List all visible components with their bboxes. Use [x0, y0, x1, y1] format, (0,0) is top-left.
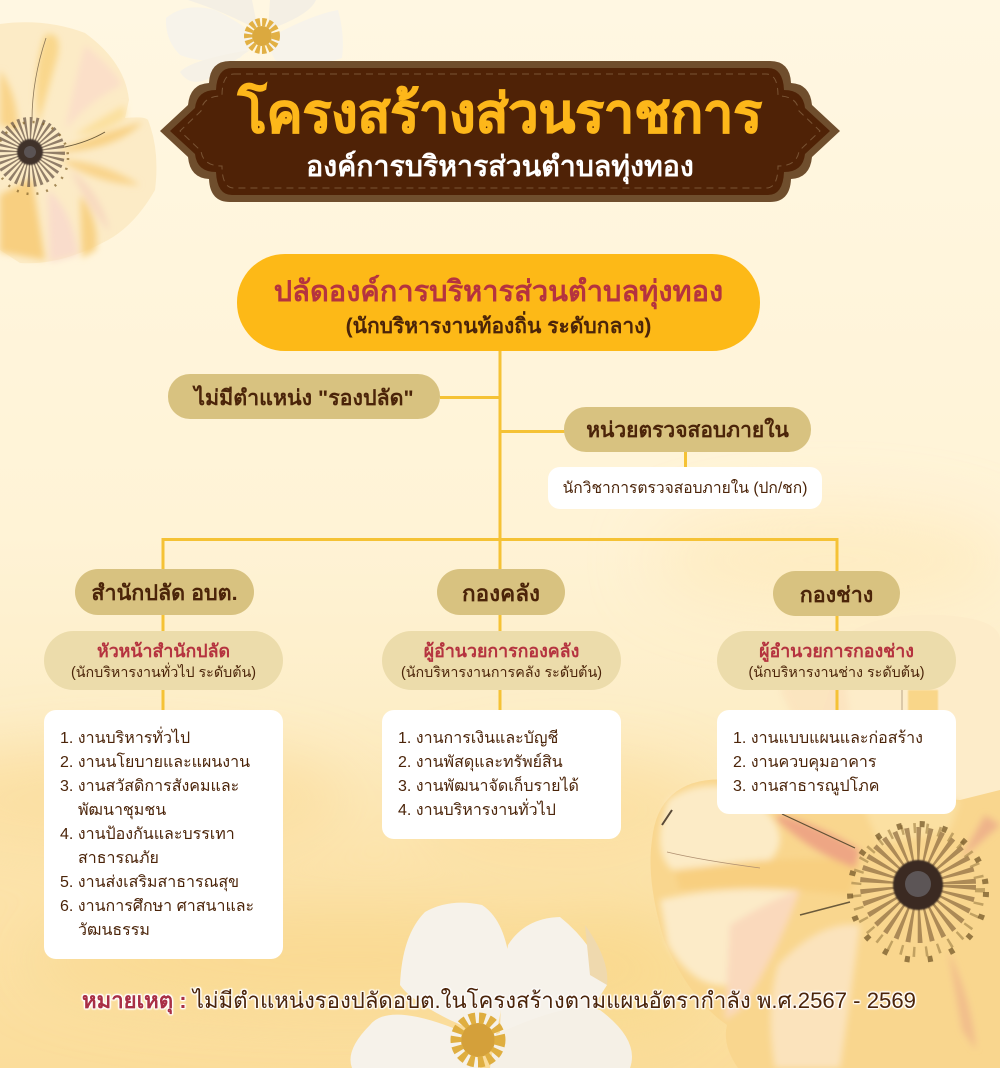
column: office of the permanent secretary — [75, 569, 254, 615]
role: head of office — [44, 631, 283, 690]
duties list: engineering: 2. งานควบคุมอาคาร — [733, 754, 876, 771]
title: โครงสร้างส่วนราชการ — [238, 84, 762, 144]
column: finance division: กองคลัง — [462, 581, 540, 606]
flower: bottom white — [350, 903, 632, 1068]
role: engineering director: ผู้อำนวยการกองช่าง — [759, 641, 914, 661]
head title: ปลัดองค์การบริหารส่วนตำบลทุ่งทอง — [274, 276, 723, 308]
duties list: office: 4. งานป้องกันและบรรเทา — [60, 826, 235, 843]
column: office of the permanent secretary: สำนักปลัด อบต. — [91, 581, 238, 605]
duties list: office — [44, 710, 283, 959]
role: finance director — [382, 631, 621, 690]
internal audit pill — [564, 407, 811, 452]
internal audit pill: หน่วยตรวจสอบภายใน — [586, 419, 789, 442]
duties list: office: สาธารณภัย — [78, 850, 159, 867]
no deputy pill — [168, 374, 440, 419]
head of organisation pill — [237, 254, 760, 351]
subtitle: องค์การบริหารส่วนตำบลทุ่งทอง — [306, 151, 694, 183]
duties list: office: พัฒนาชุมชน — [78, 802, 166, 819]
flower: top white — [166, 0, 343, 82]
duties list: office: 3. งานสวัสดิการสังคมและ — [60, 778, 239, 795]
role: finance director: ผู้อำนวยการกองคลัง — [424, 641, 579, 661]
duties list: office: 5. งานส่งเสริมสาธารณสุข — [60, 874, 239, 891]
duties list: finance: 2. งานพัสดุและทรัพย์สิน — [398, 754, 563, 771]
internal audit staff box — [548, 467, 822, 509]
role: head of office: (นักบริหารงานทั่วไป ระดับต้น) — [71, 665, 256, 681]
role: head of office: หัวหน้าสำนักปลัด — [97, 641, 230, 661]
no deputy pill: ไม่มีตำแหน่ง "รองปลัด" — [194, 386, 414, 410]
duties list: engineering — [717, 710, 956, 814]
flower: faded petal behind right column — [770, 615, 1000, 810]
column: engineering division: กองช่าง — [800, 582, 873, 606]
duties list: engineering: 3. งานสาธารณูปโภค — [733, 778, 879, 795]
role: engineering director: (นักบริหารงานช่าง ระดับต้น) — [748, 665, 925, 681]
duties list: office: 2. งานนโยบายและแผนงาน — [60, 754, 250, 771]
duties list: finance: 4. งานบริหารงานทั่วไป — [398, 802, 556, 819]
internal audit staff box: นักวิชาการตรวจสอบภายใน (ปก/ชก) — [563, 480, 807, 497]
footnote: หมายเหตุ : ไม่มีตำแหน่งรองปลัดอบต.ในโครงสร้างตามแผนอัตรากำลัง พ.ศ.2567 - 2569 — [82, 988, 916, 1013]
duties list: finance: 1. งานการเงินและบัญชี — [398, 730, 558, 747]
head rank: (นักบริหารงานท้องถิ่น ระดับกลาง) — [346, 315, 651, 338]
role: engineering director — [717, 631, 956, 690]
duties list: office: 6. งานการศึกษา ศาสนาและ — [60, 898, 254, 915]
title banner — [160, 61, 840, 202]
duties list: finance — [382, 710, 621, 839]
role: finance director: (นักบริหารงานการคลัง ระดับต้น) — [401, 665, 602, 681]
flower: bottom right yellow — [650, 779, 1000, 1068]
duties list: engineering: 1. งานแบบแผนและก่อสร้าง — [733, 730, 923, 747]
duties list: office: วัฒนธรรม — [78, 922, 150, 939]
flower: top left yellow — [0, 22, 156, 263]
column: engineering division — [773, 571, 900, 616]
column: finance division — [437, 569, 565, 615]
duties list: office: 1. งานบริหารทั่วไป — [60, 730, 190, 747]
duties list: finance: 3. งานพัฒนาจัดเก็บรายได้ — [398, 778, 579, 795]
